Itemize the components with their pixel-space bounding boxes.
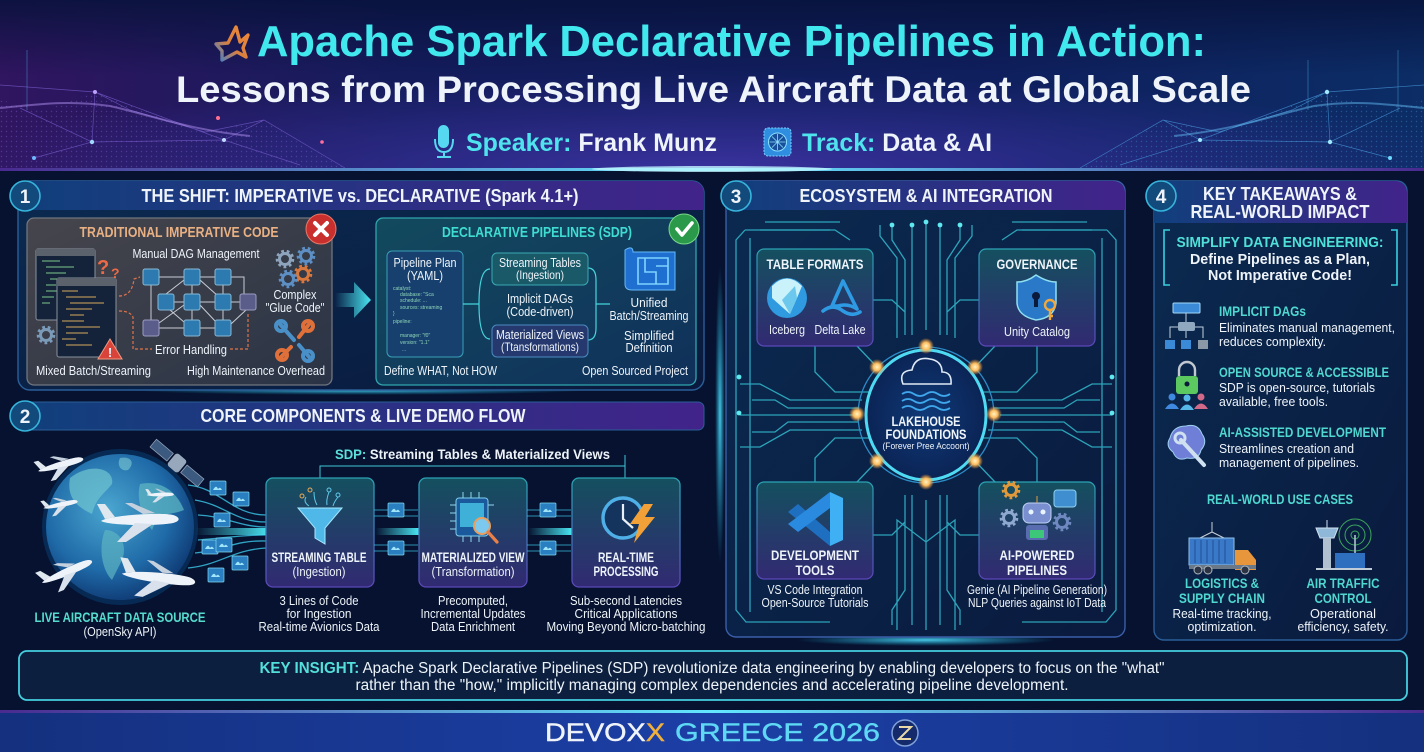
icon: satellite	[148, 437, 206, 489]
pipeline plan card: }	[393, 311, 395, 317]
development notes: VS Code Integration	[768, 583, 863, 597]
icon: aircraft mid left	[40, 494, 79, 518]
imperative heading: TRADITIONAL IMPERATIVE CODE	[80, 224, 278, 241]
key insight banner: KEY INSIGHT: Apache Spark Declarative Pipelines (SDP) revolutionize data engineering by enabling developers to focus on the "what"	[260, 660, 1164, 677]
card: materialized view: (Transformation)	[432, 564, 514, 579]
panel 3 badge	[721, 181, 751, 211]
use case: logistics: SUPPLY CHAIN	[1179, 590, 1265, 606]
icon: microphone	[435, 126, 453, 157]
data streams from globe	[188, 485, 266, 568]
card: materialized view	[419, 478, 527, 587]
ai pipeline notes: NLP Queries against IoT Data	[968, 596, 1106, 610]
title line 2: Lessons from Processing Live Aircraft Data at Global Scale	[176, 69, 1251, 110]
panel 3: ecosystem	[715, 181, 1125, 646]
callout: simplify data engineering	[1164, 230, 1397, 285]
use case: air traffic control: efficiency, safety.	[1298, 619, 1388, 634]
pipeline plan card: sources: streaming	[400, 305, 442, 311]
icon: gears	[277, 248, 314, 287]
open sourced label: Open Sourced Project	[582, 363, 688, 378]
panel 1 title: THE SHIFT: IMPERATIVE vs. DECLARATIVE (Spark 4.1+)	[142, 186, 579, 206]
pipeline plan card: manager: "f0"	[400, 333, 430, 339]
icon: question marks: ?	[97, 257, 109, 279]
icon: container truck	[1189, 522, 1256, 574]
arrow: view to processing	[527, 503, 583, 555]
pipeline plan card	[387, 251, 463, 357]
SDP label: SDP: Streaming Tables & Materialized Views	[335, 446, 610, 462]
card: development tools	[757, 482, 873, 579]
key insight banner	[19, 651, 1407, 700]
track line: Track: Data & AI	[802, 129, 992, 157]
mixed batch label: Mixed Batch/Streaming	[36, 363, 151, 378]
use case: logistics	[1172, 522, 1272, 634]
icon: question marks: ?	[111, 265, 120, 281]
development notes: Open-Source Tutorials	[762, 596, 868, 610]
lakehouse foundations hub	[858, 347, 994, 483]
panel 1 badge	[10, 181, 40, 211]
card: streaming table: STREAMING TABLE	[272, 550, 366, 565]
use case: air traffic control: AIR TRAFFIC	[1306, 575, 1380, 591]
lakehouse foundations hub: FOUNDATIONS	[886, 426, 966, 442]
panel 2: core components	[10, 401, 706, 639]
takeaway: implicit DAGs: IMPLICIT DAGs	[1219, 303, 1306, 319]
takeaway: ai-assisted	[1168, 424, 1386, 470]
lakehouse foundations hub: (Forever Pree Accoont)	[882, 441, 970, 451]
icon: chip with magnifier	[450, 492, 497, 542]
takeaway: implicit DAGs	[1165, 303, 1395, 349]
materialized views card	[492, 325, 588, 357]
streaming tables card: Streaming Tables	[499, 256, 581, 270]
materialized views card: Materialized Views	[496, 328, 584, 342]
card: streaming table: (Ingestion)	[292, 564, 346, 579]
header banner	[0, 0, 1424, 168]
takeaway: ai-assisted: Streamlines creation and	[1219, 441, 1354, 456]
maintenance label: High Maintenance Overhead	[187, 363, 325, 378]
panel 2 badge: 2	[20, 407, 30, 428]
icon: aircraft top left	[33, 450, 87, 484]
card: development tools: TOOLS	[796, 562, 834, 578]
panel 4 badge	[1146, 181, 1176, 211]
footer event name: GREECE 2026	[675, 719, 880, 747]
processing notes: Sub-second Latencies	[570, 593, 682, 608]
icon: iceberg	[767, 278, 807, 318]
card: streaming table	[266, 478, 374, 587]
imperative box	[27, 214, 336, 385]
implicit DAGs text: (Code-driven)	[506, 304, 574, 319]
circuit traces	[736, 222, 1116, 630]
card: ai-powered pipelines	[979, 482, 1095, 579]
icon: code windows	[36, 249, 116, 357]
card: ai-powered pipelines: AI-POWERED	[1000, 547, 1074, 563]
callout: simplify data engineering: Define Pipelines as a Plan,	[1190, 251, 1370, 268]
streaming tables card: (Ingestion)	[516, 268, 564, 282]
pipeline plan card: (YAML)	[407, 268, 443, 283]
icon: hierarchy	[1165, 303, 1208, 349]
panel 1 header	[18, 181, 704, 210]
icon: chip	[764, 128, 791, 156]
card: ai-powered pipelines: PIPELINES	[1007, 562, 1067, 578]
takeaway: open source: SDP is open-source, tutorials	[1219, 380, 1375, 395]
header divider glow	[0, 166, 1424, 172]
complex glue code label: Complex	[274, 287, 317, 302]
icon: control tower and radar	[1316, 519, 1372, 569]
panel 2 badge	[10, 401, 40, 431]
panel 2 title: CORE COMPONENTS & LIVE DEMO FLOW	[200, 406, 526, 426]
pipeline plan card: catalyst:	[393, 286, 411, 292]
processing notes: Critical Applications	[574, 606, 678, 621]
panel 4 header	[1154, 181, 1407, 223]
card: table formats: Delta Lake	[814, 323, 866, 337]
takeaway: open source	[1165, 362, 1389, 410]
takeaway: open source: available, free tools.	[1219, 394, 1328, 409]
use case: air traffic control: CONTROL	[1314, 590, 1372, 606]
panel 3 badge: 3	[731, 187, 741, 208]
footer	[0, 710, 1424, 752]
DAG label: Manual DAG Management	[132, 246, 260, 261]
icon: aircraft lower right	[115, 556, 197, 604]
arrow: table to view	[374, 503, 430, 555]
takeaway: ai-assisted: AI-ASSISTED DEVELOPMENT	[1219, 424, 1386, 440]
callout: simplify data engineering: Not Imperative Code!	[1208, 267, 1352, 284]
takeaway: implicit DAGs: reduces complexity.	[1219, 334, 1326, 349]
card: governance: GOVERNANCE	[996, 257, 1078, 272]
streaming table notes: Real-time Avionics Data	[258, 619, 380, 634]
panel 3 header	[726, 181, 1125, 210]
panel 4: key takeaways	[1146, 181, 1407, 640]
panel 1 badge: 1	[20, 187, 31, 208]
card: table formats: TABLE FORMATS	[766, 257, 864, 272]
icon: green check	[669, 214, 699, 244]
key insight banner: rather than the "how," implicitly managing complex dependencies and accelerating pipeline development.	[356, 677, 1068, 694]
data source label: LIVE AIRCRAFT DATA SOURCE	[34, 609, 206, 625]
panel 4 title: REAL-WORLD IMPACT	[1190, 202, 1370, 222]
panel 4 badge: 4	[1156, 187, 1167, 208]
callout: simplify data engineering: SIMPLIFY DATA ENGINEERING:	[1176, 234, 1384, 251]
footer event name	[545, 719, 880, 747]
pipeline plan card: ...	[402, 347, 406, 353]
takeaway: open source: OPEN SOURCE & ACCESSIBLE	[1219, 364, 1389, 380]
card: table formats	[757, 249, 873, 346]
icon: clock and bolt	[603, 498, 655, 543]
panel 3 title: ECOSYSTEM & AI INTEGRATION	[800, 186, 1052, 206]
simplified text: Simplified	[624, 328, 674, 343]
icon: warning triangle: !	[108, 345, 112, 360]
materialized view notes: Incremental Updates	[420, 606, 526, 621]
icon: aircraft big center	[97, 503, 179, 542]
card: table formats: Iceberg	[769, 323, 805, 337]
trace terminals	[737, 220, 1114, 415]
use case: air traffic control	[1298, 519, 1388, 634]
footer event name: DEVO XX	[545, 719, 665, 747]
icon: question marks	[97, 257, 120, 281]
api label: (OpenSky API)	[84, 625, 156, 639]
use case: logistics: Real-time tracking,	[1172, 606, 1272, 621]
pipeline plan card: database: "Sca	[400, 292, 434, 298]
pipeline plan card: schedule: ...	[400, 298, 427, 304]
implicit DAGs text: Implicit DAGs	[507, 291, 573, 306]
define what label: Define WHAT, Not HOW	[384, 363, 498, 378]
icon: aircraft lower left	[35, 551, 98, 598]
declarative box	[376, 214, 699, 385]
card: real-time processing: REAL-TIME	[598, 550, 654, 565]
icon: cloud and waves	[902, 358, 951, 410]
card: development tools: DEVELOPMENT	[771, 547, 859, 563]
pipeline plan card: Pipeline Plan	[394, 255, 456, 270]
connector lines	[463, 268, 610, 340]
materialized views card: (Ttansformations)	[501, 340, 579, 354]
streaming tables card	[492, 253, 588, 285]
lakehouse foundations hub: LAKEHOUSE	[892, 413, 960, 429]
takeaway: implicit DAGs: Eliminates manual management,	[1219, 320, 1395, 335]
complex glue code label: "Glue Code"	[266, 300, 325, 315]
error handling label: Error Handling	[155, 342, 227, 357]
icon: warning triangle	[98, 339, 122, 360]
hub nodes	[849, 338, 1002, 490]
icon: broken chain	[276, 321, 313, 361]
card: governance: Unity Catalog	[1004, 325, 1070, 339]
unified text: Batch/Streaming	[610, 308, 688, 323]
card: governance	[979, 249, 1095, 346]
icon: padlock and people	[1165, 362, 1208, 410]
pipeline plan card: pipeline:	[393, 319, 412, 325]
card: materialized view: MATERIALIZED VIEW	[422, 550, 525, 565]
icon: aircraft mid right	[145, 489, 174, 502]
icon: small gear	[38, 327, 54, 343]
arrow: imperative to declarative	[335, 282, 371, 318]
processing notes: Moving Beyond Micro-batching	[546, 619, 706, 634]
use cases heading: REAL-WORLD USE CASES	[1207, 491, 1353, 507]
icon: vs code	[788, 492, 843, 546]
streaming table notes: 3 Lines of Code	[280, 593, 358, 608]
icon: spark logo star	[216, 27, 248, 60]
DAG diagram	[119, 269, 256, 349]
icon: shield and key	[1017, 275, 1056, 320]
unified text: Unified	[630, 295, 668, 310]
pipeline plan card: version: "1.1"	[400, 340, 430, 346]
streaming table notes: for Ingestion	[286, 606, 352, 621]
declarative heading: DECLARATIVE PIPELINES (SDP)	[442, 224, 632, 241]
footer logo	[892, 720, 918, 746]
use case: logistics: optimization.	[1188, 619, 1256, 634]
icon: blueprint	[625, 248, 675, 290]
speaker line: Speaker: Frank Munz	[466, 129, 717, 157]
globe	[42, 449, 198, 605]
materialized view notes: Precomputed,	[438, 593, 508, 608]
panel 4 title: KEY TAKEAWAYS &	[1203, 184, 1357, 204]
title line 1: Apache Spark Declarative Pipelines in Action:	[257, 17, 1206, 66]
panel 2 header	[25, 402, 704, 430]
SDP bracket	[320, 455, 625, 478]
use case: logistics: LOGISTICS &	[1185, 575, 1259, 591]
icon: red X	[306, 214, 336, 244]
card: real-time processing: PROCESSING	[594, 564, 658, 579]
icon: robot	[1001, 482, 1076, 540]
icon: data cards in stream	[202, 481, 249, 582]
icon: brain and wrench	[1168, 425, 1205, 465]
card: real-time processing	[572, 478, 680, 587]
panel 1: the shift	[10, 181, 704, 395]
use case: air traffic control: Operational	[1310, 606, 1376, 621]
icon: delta lake	[823, 281, 860, 314]
ai pipeline notes: Genie (AI Pipeline Generation)	[967, 583, 1107, 597]
simplified text: Definition	[626, 340, 672, 355]
takeaway: ai-assisted: management of pipelines.	[1219, 455, 1359, 470]
icon: funnel	[298, 488, 342, 544]
materialized view notes: Data Enrichment	[431, 619, 515, 634]
